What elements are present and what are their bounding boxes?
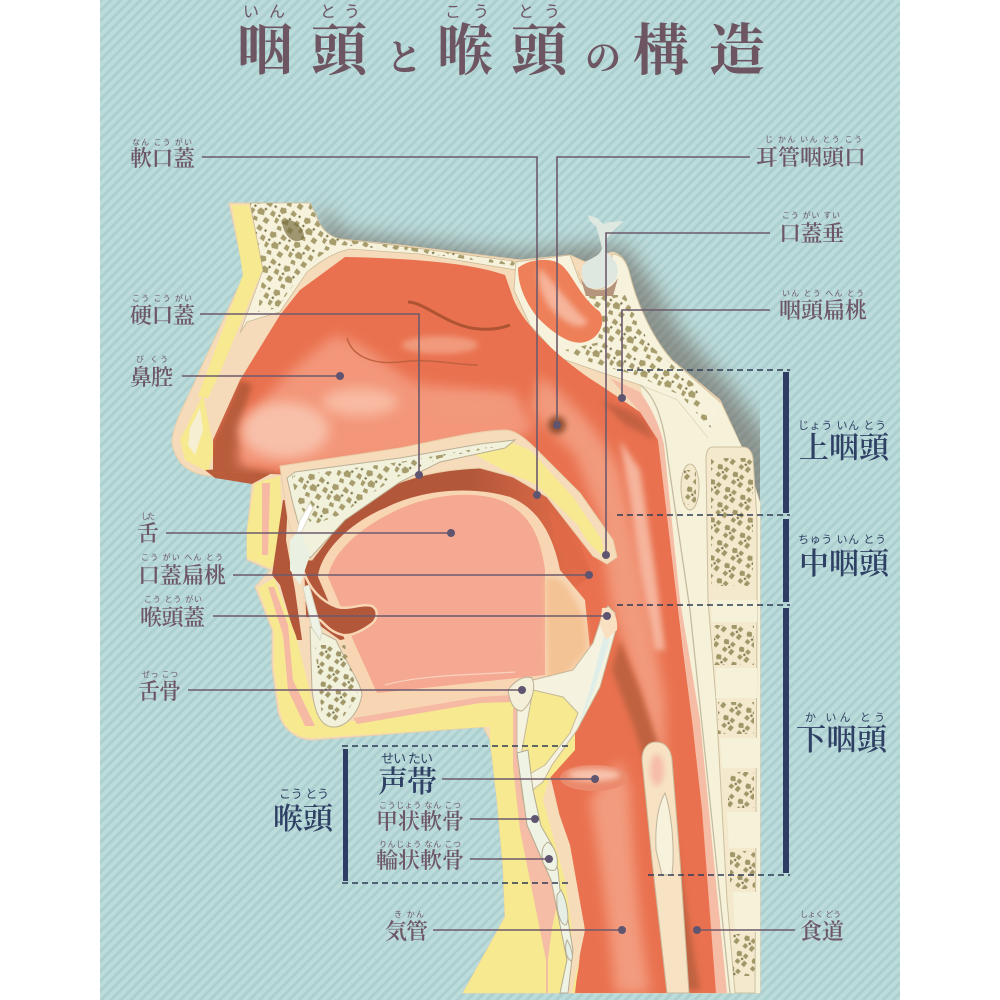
label: palatine tonsil — [138, 552, 593, 588]
cricoid and tracheal cartilage — [517, 750, 573, 993]
uvula — [578, 215, 624, 296]
esophagus wall — [642, 742, 689, 993]
label: epiglottis: 喉頭蓋 — [140, 605, 205, 630]
skull frontal bone — [240, 203, 520, 333]
label: oropharynx — [798, 533, 890, 581]
label: tongue — [137, 512, 455, 546]
label: cricoid cartilage — [376, 840, 553, 873]
label: trachea — [385, 910, 626, 944]
nasal cavity and pharynx: red mucosa — [213, 257, 716, 993]
label: nasal cavity — [130, 355, 344, 390]
label: cricoid cartilage: 輪状軟骨 — [376, 848, 464, 873]
title: こう — [445, 4, 489, 21]
title: 構造 — [633, 21, 765, 83]
label: thyroid cartilage: こうじょう なん こつ — [379, 801, 461, 810]
label: vocal cords: 声帯 — [378, 766, 437, 799]
label: hyoid bone — [138, 670, 526, 704]
sphenoid sinus — [518, 260, 602, 343]
label: thyroid cartilage: 甲状軟骨 — [376, 809, 464, 834]
title: とう — [518, 4, 560, 21]
tongue underside hook — [303, 570, 377, 635]
nasal floor shadow under the nose — [205, 466, 285, 484]
label: larynx bracket: こう とう — [279, 787, 329, 801]
mucosa shading — [205, 302, 700, 993]
label: epiglottis — [140, 594, 611, 630]
label: soft palate: なん こう がい — [132, 137, 192, 147]
label: vocal cords: せい たい — [381, 751, 433, 766]
chin and under-jaw fat — [258, 578, 515, 738]
label: trachea: き かん — [394, 910, 424, 919]
label: esophagus: しょく どう — [800, 910, 841, 919]
front neck fat — [463, 700, 580, 993]
label: hard palate — [130, 293, 423, 479]
label: hypopharynx: 下咽頭 — [796, 724, 888, 757]
label: hyoid bone: ぜっ こつ — [142, 670, 178, 679]
label: thyroid cartilage — [376, 801, 539, 834]
label: nasopharynx: じょう いん とう — [798, 419, 886, 432]
label: larynx bracket — [273, 746, 570, 883]
label: oropharynx: ちゅう いん とう — [798, 533, 886, 546]
label: vocal cords — [378, 751, 599, 799]
label: hypopharynx: か いん とう — [805, 711, 885, 724]
label: hard palate: 硬口蓋 — [130, 303, 195, 328]
label: oropharynx: 中咽頭 — [799, 548, 890, 581]
infographic: pharynx and larynx structure — [100, 0, 900, 1000]
title: 咽頭 — [237, 21, 370, 83]
title: いん — [243, 4, 285, 21]
label: cricoid cartilage: りんじょう なん こつ — [379, 840, 461, 849]
head and neck silhouette — [172, 203, 760, 993]
tongue — [318, 490, 590, 724]
label: esophagus — [693, 910, 844, 944]
thyroid and hyoid cartilage — [508, 606, 617, 993]
title: と — [386, 38, 422, 78]
label: nasal cavity: 鼻腔 — [130, 365, 173, 390]
label: eustachian tube opening: じ かん いん とう こう — [765, 135, 862, 144]
label: eustachian tube opening — [553, 135, 866, 429]
panel: teal striped background — [100, 0, 900, 1000]
title — [237, 4, 765, 83]
label: uvula: こう がい すい — [782, 210, 840, 220]
label: tongue: した — [141, 512, 155, 521]
lower jaw bone and lower tooth — [303, 585, 362, 727]
label: trachea: 気管 — [385, 919, 428, 944]
mouth cavity brown — [303, 466, 592, 640]
label: eustachian tube opening: 耳管咽頭口 — [756, 145, 866, 170]
lips — [247, 476, 302, 640]
label: hyoid bone: 舌骨 — [138, 679, 181, 704]
label: palatine tonsil: 口蓋扁桃 — [138, 563, 226, 588]
label: pharyngeal tonsil: いん とう へん とう — [782, 289, 864, 298]
forehead and nose fat — [180, 205, 263, 472]
label: larynx bracket: 喉頭 — [273, 803, 334, 836]
label: nasopharynx: 上咽頭 — [799, 432, 890, 465]
head drop shadow — [314, 203, 760, 501]
label: palatine tonsil: こう がい へん とう — [141, 552, 223, 562]
neck pink strip — [513, 708, 558, 993]
vocal cord — [560, 765, 628, 791]
label: epiglottis: こう とう がい — [144, 594, 202, 604]
label: esophagus: 食道 — [800, 919, 844, 944]
title: とう — [320, 4, 360, 21]
label: hard palate: こう こう がい — [132, 293, 192, 303]
label: soft palate — [130, 137, 541, 499]
title: の — [585, 38, 621, 78]
posterior pharyngeal pink wall — [610, 378, 727, 993]
label: soft palate: 軟口蓋 — [130, 146, 195, 171]
occipital and sphenoid bone — [514, 254, 720, 438]
hard and soft palate — [280, 430, 617, 585]
label: pharyngeal tonsil — [618, 289, 867, 402]
label: tongue: 舌 — [137, 521, 159, 546]
label: nasal cavity: び くう — [136, 355, 168, 364]
label: uvula: 口蓋垂 — [779, 221, 844, 246]
label: uvula — [602, 210, 844, 559]
title: 喉頭 — [437, 21, 570, 83]
label: pharyngeal tonsil: 咽頭扁桃 — [779, 298, 867, 323]
vertebral column base — [640, 385, 760, 993]
pharynx section brackets — [617, 370, 790, 875]
